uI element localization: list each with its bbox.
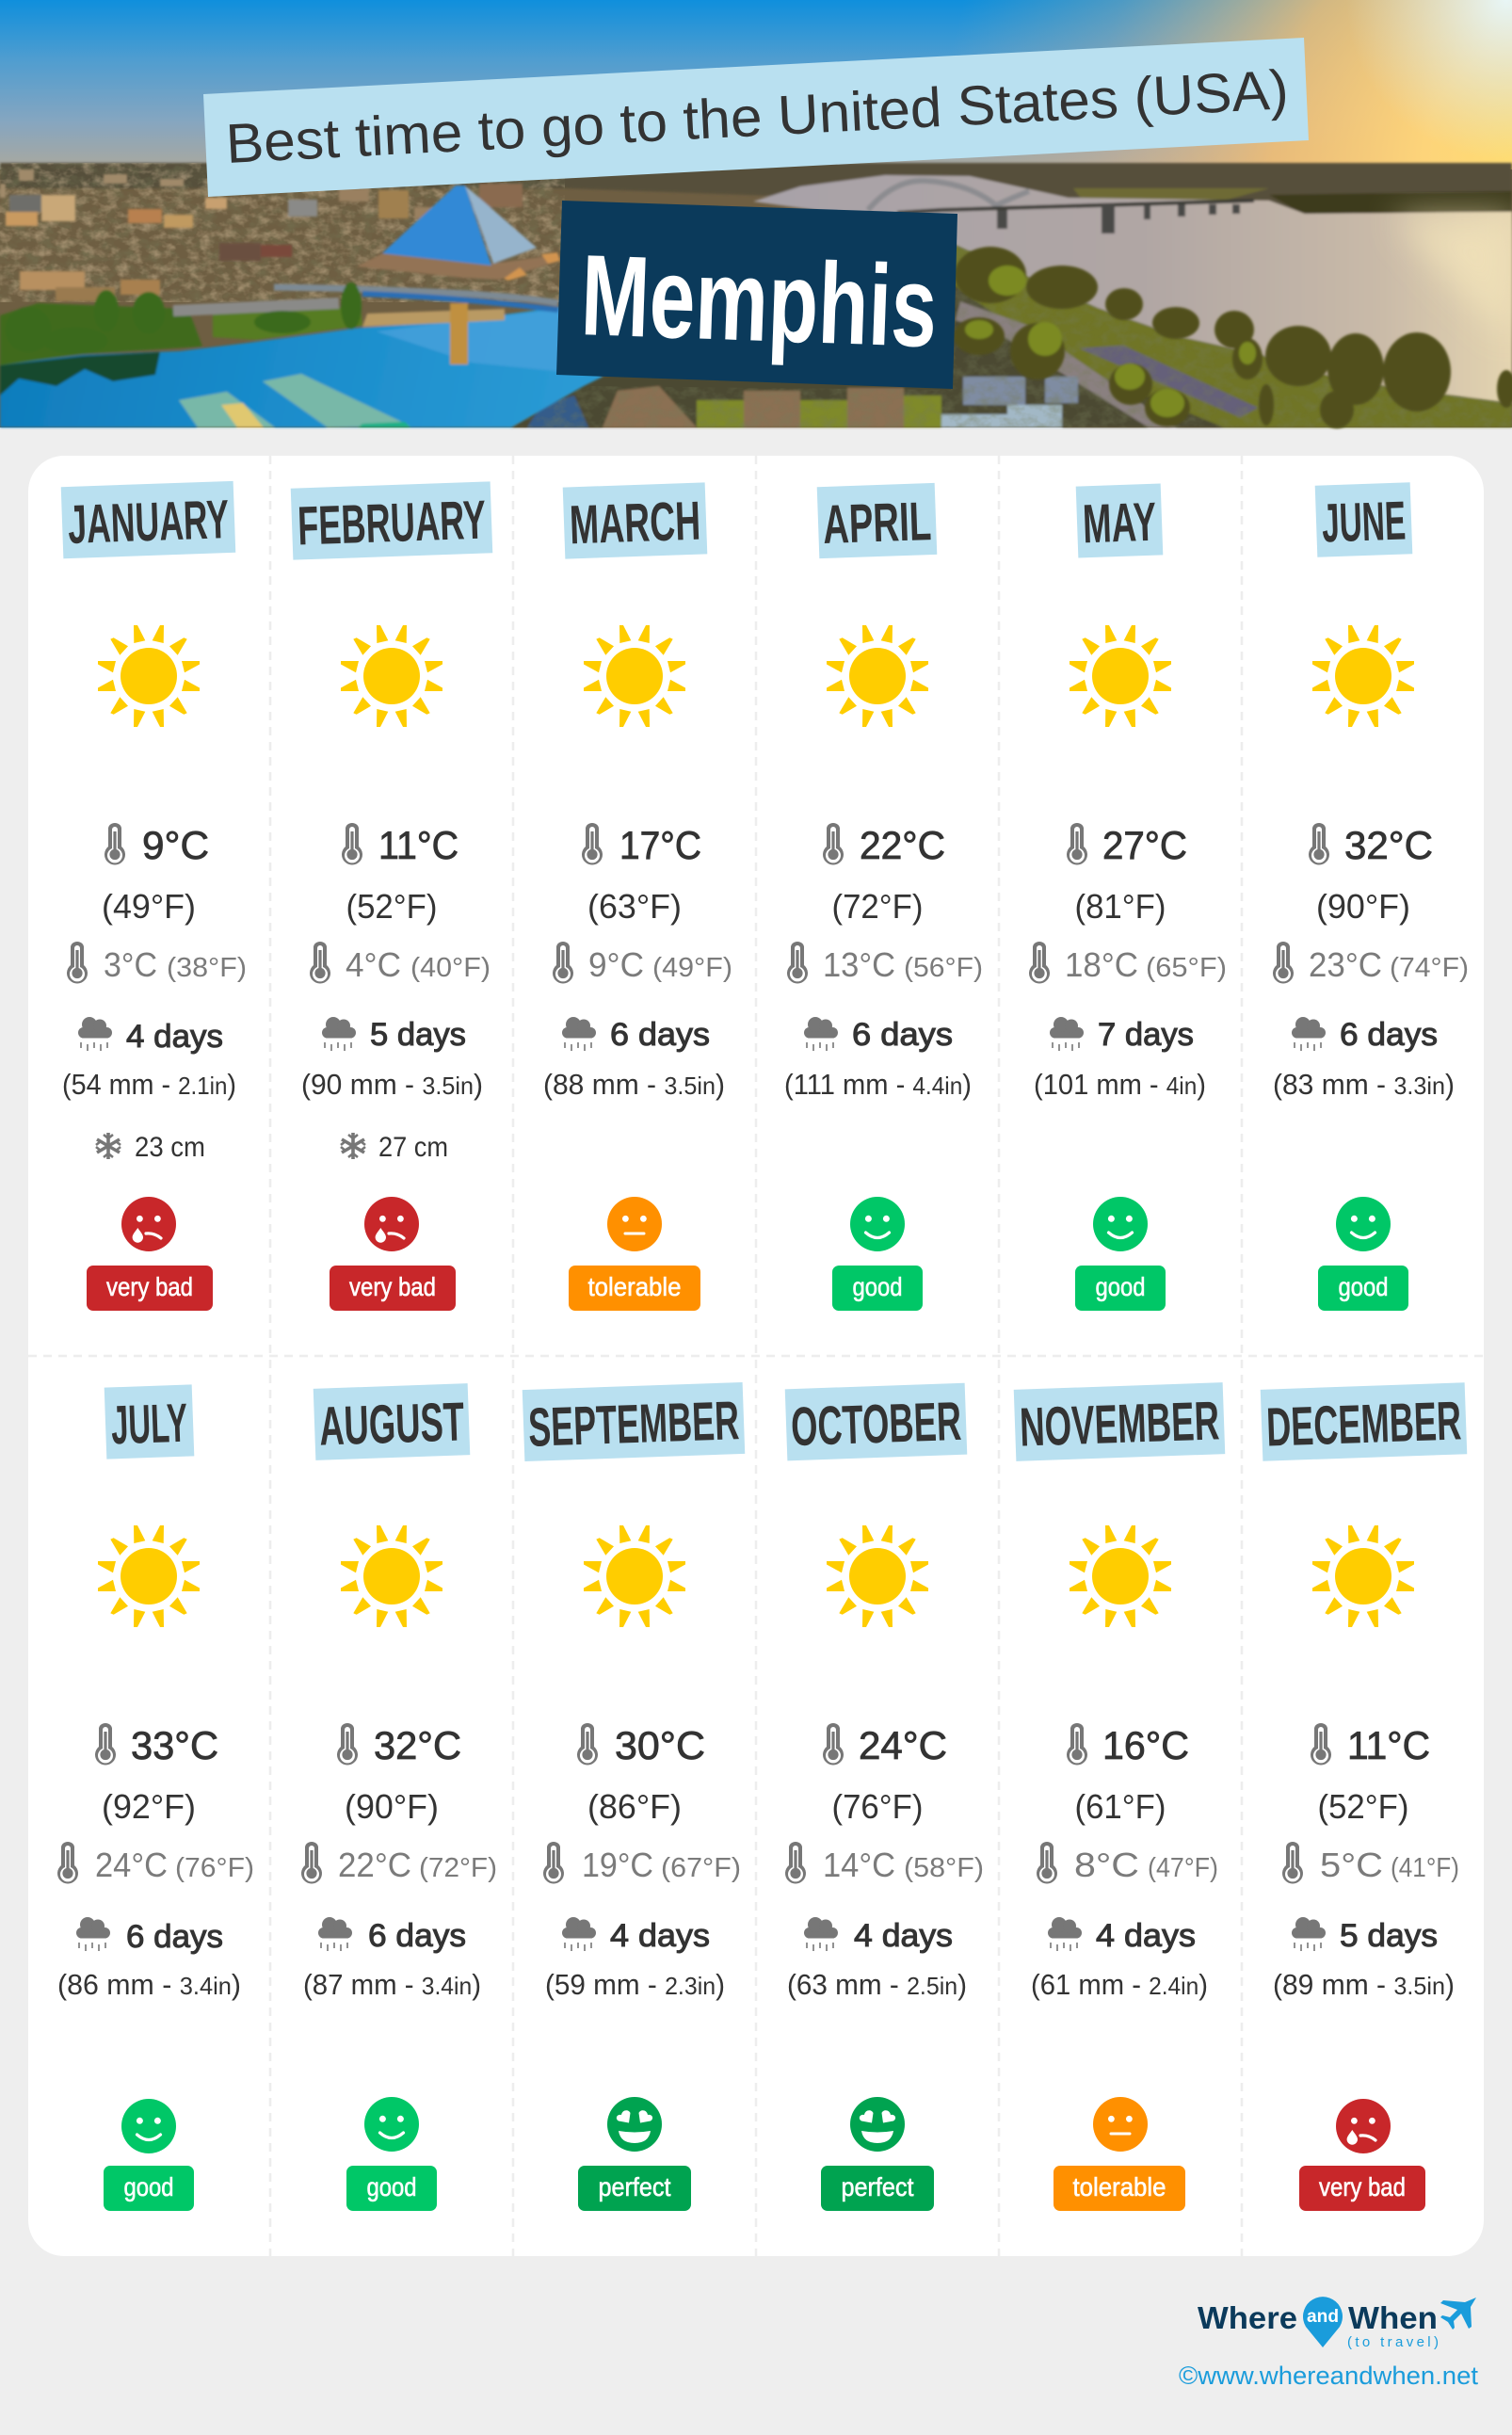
icon: sun (98, 625, 200, 727)
icon: rating face (1336, 2099, 1391, 2153)
low temperature: (40°F) (410, 953, 491, 983)
label (785, 1383, 967, 1460)
rating pill (569, 1266, 700, 1311)
rainy days (1050, 1017, 1194, 1053)
icon: sun (1312, 1525, 1414, 1627)
rainfall: (61 mm - 2.4in) (1031, 1968, 1208, 2001)
low temperature (57, 1842, 254, 1884)
low temperature: 18°C (1065, 945, 1138, 984)
bridge pier on lake (450, 303, 468, 364)
right land texture (511, 245, 1512, 427)
label (1076, 483, 1163, 558)
rainy days (1048, 1917, 1196, 1954)
icon: sun (584, 1525, 685, 1627)
low temperature: 13°C (823, 945, 895, 984)
low temperature: (58°F) (904, 1853, 984, 1883)
low temperature (310, 942, 491, 984)
pyramid (357, 253, 560, 280)
rating pill: good (124, 2172, 173, 2201)
logo: Where and When (1198, 2297, 1476, 2350)
rainfall: (88 mm - 3.5in) (543, 1068, 725, 1101)
rating pill (330, 1266, 456, 1311)
rating pill (832, 1266, 923, 1311)
label: MARCH (569, 491, 701, 556)
lower right land (511, 245, 1512, 427)
icon: rating face (850, 2097, 905, 2152)
far bank (0, 163, 1512, 218)
high temperature F: (90°F) (1316, 887, 1410, 926)
logo: Where and When: When (1348, 2300, 1438, 2335)
high temperature: 32°C (1344, 823, 1433, 867)
high temperature F: (61°F) (1075, 1787, 1166, 1826)
rainfall: (87 mm - 3.4in) (303, 1968, 481, 2001)
low temperature (301, 1842, 497, 1884)
high temperature: 33°C (131, 1723, 218, 1767)
rating pill (104, 2166, 194, 2211)
copyright url: ©www.whereandwhen.net (1179, 2362, 1478, 2390)
low temperature: 3°C (104, 945, 157, 984)
rainy days (562, 1917, 710, 1954)
month: November (1014, 1382, 1225, 2211)
rainy days (318, 1917, 466, 1954)
low temperature: (65°F) (1146, 953, 1227, 983)
high temperature F: (72°F) (832, 887, 923, 926)
rainy days: 5 days (1340, 1918, 1438, 1954)
sunlight on river (1393, 217, 1512, 339)
rating pill: very bad (349, 1272, 436, 1301)
low temperature: 22°C (338, 1846, 411, 1884)
rainy days: 6 days (1340, 1017, 1438, 1053)
rating pill: very bad (106, 1272, 193, 1301)
snowfall: 23 cm (135, 1132, 205, 1163)
snowfall: 27 cm (378, 1132, 448, 1163)
docks (263, 374, 410, 427)
month: October (785, 1383, 984, 2211)
label (563, 482, 707, 559)
rating pill (87, 1266, 213, 1311)
label: APRIL (822, 491, 932, 556)
low temperature: (67°F) (661, 1853, 741, 1883)
snowfall (341, 1132, 448, 1163)
icon: map pin (1303, 2297, 1343, 2347)
label (105, 1384, 194, 1459)
label: JULY (110, 1393, 188, 1456)
logo: Where and When: (to travel) (1347, 2334, 1439, 2350)
city texture (0, 163, 565, 302)
rainy days (804, 1917, 953, 1954)
rating pill (1075, 1266, 1166, 1311)
icon: sun (341, 625, 442, 727)
rainfall: (90 mm - 3.5in) (301, 1068, 483, 1101)
high temperature (582, 823, 701, 867)
low temperature: 9°C (588, 945, 644, 984)
month: December (1261, 1382, 1467, 2211)
high temperature F: (86°F) (587, 1787, 682, 1826)
low temperature: (47°F) (1148, 1853, 1218, 1883)
rainy days: 7 days (1098, 1017, 1194, 1053)
rainfall: (54 mm - 2.1in) (62, 1068, 236, 1101)
month: June (1273, 482, 1469, 1311)
label: FEBRUARY (297, 490, 487, 556)
icon: rating face (364, 2097, 419, 2152)
month: August (301, 1383, 497, 2211)
label: AUGUST (318, 1391, 465, 1458)
rainy days: 6 days (126, 1919, 223, 1955)
high temperature: 30°C (615, 1723, 705, 1767)
rainy days: 4 days (610, 1918, 710, 1954)
rainy days (78, 1017, 223, 1055)
icon: rating face (607, 1197, 662, 1251)
icon: sun (341, 1525, 442, 1627)
rating pill: perfect (842, 2172, 914, 2201)
icon: sun (827, 625, 928, 727)
month: April (784, 483, 983, 1311)
low temperature (785, 1842, 984, 1884)
high temperature F: (76°F) (832, 1787, 923, 1826)
rating pill: perfect (599, 2172, 671, 2201)
month: July (57, 1384, 254, 2211)
high temperature F: (90°F) (345, 1787, 439, 1826)
high temperature: 24°C (859, 1723, 947, 1767)
rainfall: (111 mm - 4.4in) (784, 1068, 972, 1101)
high temperature (342, 823, 458, 867)
high temperature: 11°C (378, 823, 458, 867)
rainy days (562, 1017, 710, 1053)
city buildings (41, 195, 75, 221)
low temperature: (72°F) (419, 1853, 497, 1883)
low temperature: 14°C (823, 1846, 895, 1884)
label (61, 481, 235, 558)
high temperature F: (92°F) (102, 1787, 196, 1826)
high temperature (1067, 823, 1187, 867)
highway (173, 303, 339, 311)
rainy days: 6 days (852, 1017, 953, 1053)
low temperature: (56°F) (904, 953, 983, 983)
low temperature (787, 942, 983, 984)
rainy days (1292, 1017, 1438, 1053)
shoreline trees (6, 282, 362, 354)
logo: Where and When: Where (1198, 2300, 1297, 2335)
rainy days: 5 days (370, 1017, 466, 1053)
high temperature F: (52°F) (346, 887, 437, 926)
low temperature: 5°C (1320, 1846, 1383, 1884)
label: JANUARY (67, 489, 230, 556)
rainy days: 4 days (854, 1918, 953, 1954)
high temperature (105, 823, 209, 867)
rainy days: 4 days (1096, 1918, 1196, 1954)
high temperature: 16°C (1102, 1723, 1189, 1767)
high temperature: 32°C (374, 1723, 461, 1767)
rainfall: (89 mm - 3.5in) (1273, 1968, 1455, 2001)
calendar card (28, 456, 1484, 2256)
month: September (523, 1382, 745, 2211)
low temperature: (74°F) (1390, 953, 1469, 983)
riverside road (1080, 346, 1258, 417)
label (523, 1382, 745, 1461)
green shore (0, 303, 202, 365)
low temperature (1282, 1842, 1459, 1884)
label: JUNE (1321, 490, 1407, 555)
rainfall: (86 mm - 3.4in) (57, 1968, 241, 2001)
low temperature (67, 942, 247, 984)
icon: sun (1070, 1525, 1171, 1627)
title banner: Best time to go to the United States (USA) (224, 58, 1290, 175)
rating pill: tolerable (587, 1272, 682, 1301)
low temperature: 8°C (1074, 1846, 1139, 1884)
high temperature: 27°C (1102, 823, 1187, 867)
month: May (1029, 483, 1227, 1311)
low temperature (543, 1842, 741, 1884)
icon: rating face (121, 1197, 176, 1251)
label (314, 1383, 470, 1460)
label: SEPTEMBER (527, 1390, 740, 1459)
rainy days: 6 days (368, 1918, 466, 1954)
icon: rating face (1336, 1197, 1391, 1251)
high temperature: 17°C (619, 823, 701, 867)
city name box (556, 201, 957, 389)
rainy days: 4 days (126, 1019, 223, 1055)
rainy days (804, 1017, 953, 1053)
rating pill: good (1339, 1272, 1388, 1301)
title banner (203, 38, 1309, 197)
high temperature: 22°C (860, 823, 945, 867)
rating pill (1318, 1266, 1408, 1311)
label: OCTOBER (790, 1391, 962, 1458)
high temperature (577, 1723, 705, 1767)
logo: Where and When: and (1307, 2307, 1339, 2327)
low temperature (1273, 942, 1469, 984)
icon: sun (827, 1525, 928, 1627)
low temperature: 24°C (95, 1846, 168, 1884)
month: February (291, 481, 492, 1311)
icon: rating face (364, 1197, 419, 1251)
city name box: Memphis (579, 231, 940, 371)
icon: sun (1312, 625, 1414, 727)
low temperature: 4°C (346, 945, 401, 984)
label (817, 483, 937, 558)
low temperature: (76°F) (175, 1853, 254, 1883)
low temperature: 23°C (1309, 945, 1382, 984)
river (753, 175, 1512, 403)
high temperature F: (52°F) (1318, 1787, 1408, 1826)
rating pill: very bad (1319, 2172, 1406, 2201)
icon: sun (1070, 625, 1171, 727)
houses (963, 377, 1078, 405)
high temperature (1311, 1723, 1430, 1767)
rating pill (1054, 2166, 1185, 2211)
rating pill: good (367, 2172, 416, 2201)
high temperature (823, 823, 945, 867)
icon: sun (98, 1525, 200, 1627)
rainy days (76, 1917, 223, 1955)
high temperature (1067, 1723, 1189, 1767)
rating pill: good (1096, 1272, 1145, 1301)
rainfall: (63 mm - 2.5in) (787, 1968, 967, 2001)
hero photo: Memphis skyline and river (0, 0, 1512, 428)
icon: rating face (1093, 1197, 1148, 1251)
icon: sun (584, 625, 685, 727)
low temperature: (41°F) (1391, 1853, 1459, 1883)
rainfall: (83 mm - 3.3in) (1273, 1068, 1455, 1101)
rainy days (1292, 1917, 1438, 1954)
rating pill: tolerable (1073, 2172, 1166, 2201)
low temperature (553, 942, 732, 984)
month: January (61, 481, 247, 1311)
snowfall (96, 1132, 205, 1163)
low temperature (1037, 1842, 1218, 1884)
icon: plane (1440, 2298, 1476, 2330)
rainy days: 6 days (610, 1017, 710, 1053)
high temperature F: (81°F) (1075, 887, 1166, 926)
low temperature (1029, 942, 1227, 984)
lake (0, 306, 603, 427)
rainfall: (101 mm - 4in) (1034, 1068, 1206, 1101)
icon: rating face (1093, 2097, 1148, 2152)
bridge (868, 181, 1029, 210)
rating pill (578, 2166, 691, 2211)
label (1014, 1382, 1225, 1461)
rating pill (821, 2166, 934, 2211)
icon: rating face (607, 2097, 662, 2152)
rating pill (346, 2166, 437, 2211)
icon: rating face (121, 2099, 176, 2153)
high temperature F: (49°F) (102, 887, 196, 926)
icon: rating face (850, 1197, 905, 1251)
low temperature: (38°F) (167, 953, 247, 983)
label: MAY (1082, 492, 1157, 555)
rainfall: (59 mm - 2.3in) (545, 1968, 725, 2001)
rating pill (1299, 2166, 1425, 2211)
rating pill: good (853, 1272, 902, 1301)
rainy days (322, 1017, 466, 1053)
high temperature: 11°C (1347, 1723, 1430, 1767)
label (1315, 482, 1412, 557)
low temperature: 19°C (582, 1846, 653, 1884)
label: NOVEMBER (1019, 1390, 1220, 1459)
riverside trees (954, 247, 1512, 428)
month: March (543, 482, 732, 1311)
high temperature F: (63°F) (587, 887, 682, 926)
label (291, 481, 492, 560)
low temperature: (49°F) (652, 953, 732, 983)
high temperature: 9°C (142, 823, 209, 867)
